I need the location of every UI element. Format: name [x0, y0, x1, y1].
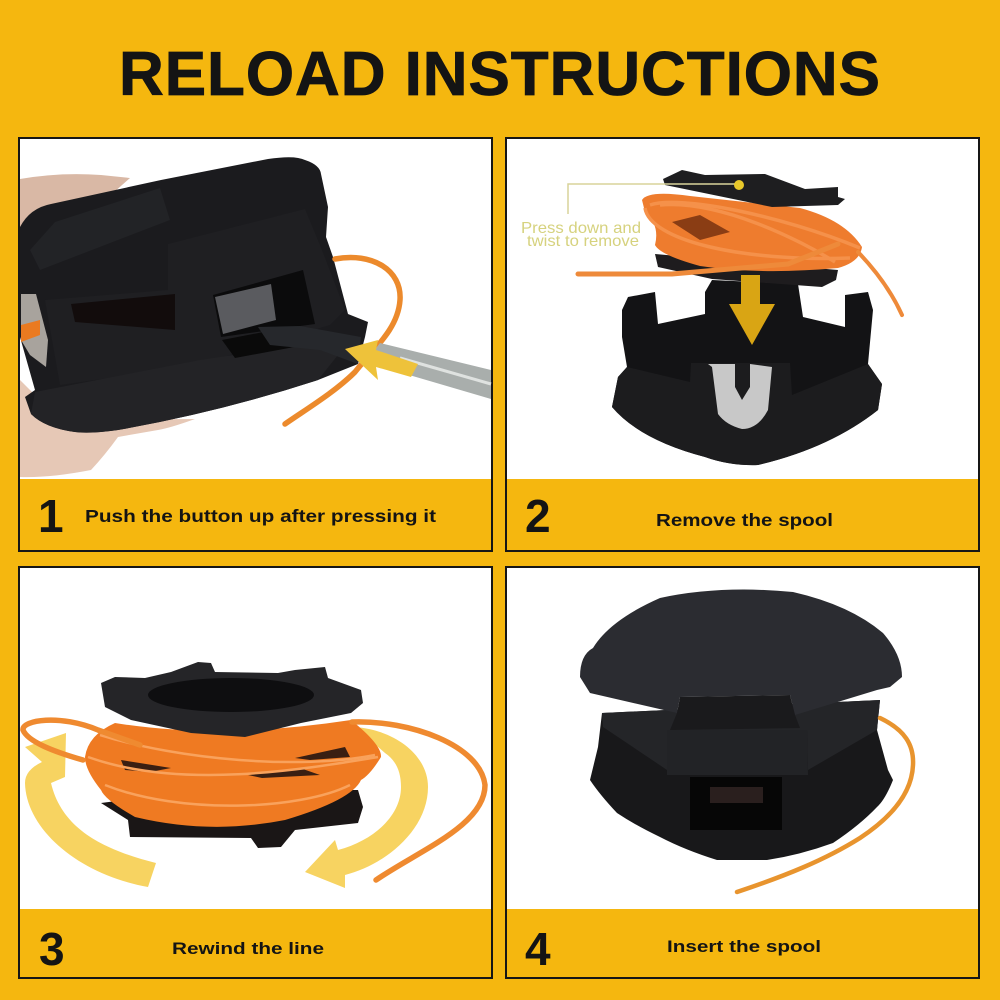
metal tool	[258, 326, 491, 399]
orange line	[737, 718, 913, 892]
window	[690, 777, 782, 830]
notch	[670, 695, 800, 730]
caption bar	[20, 479, 491, 550]
hand holding the head	[20, 174, 195, 477]
panel 4: insert the spool	[506, 567, 979, 978]
step number 4: 4	[525, 923, 551, 975]
curved arrows	[25, 727, 428, 888]
title: RELOAD INSTRUCTIONS	[119, 40, 880, 109]
lower spool flange	[655, 254, 838, 287]
orange coil	[578, 170, 902, 315]
caption bar	[20, 909, 491, 977]
base front slab	[612, 363, 882, 465]
step number 2: 2	[525, 490, 551, 542]
panel 2: remove the spool	[506, 138, 979, 551]
metal clip	[708, 364, 772, 429]
caption 2: Remove the spool	[656, 510, 833, 530]
callout: Press down and	[521, 220, 641, 237]
caption 1: Push the button up after pressing it	[85, 506, 436, 526]
tab	[667, 730, 808, 775]
line tails	[23, 720, 485, 880]
caption bar	[507, 479, 978, 550]
raised front panel	[45, 209, 345, 385]
top spool flange	[663, 170, 845, 207]
metal eyelet	[21, 294, 48, 367]
callout	[521, 180, 744, 250]
orange line	[285, 257, 400, 424]
step number 1: 1	[38, 490, 64, 542]
panel 1: push the button	[19, 138, 492, 551]
trimmer head side view	[20, 157, 368, 433]
step number 3: 3	[39, 923, 65, 975]
upper band	[602, 700, 880, 770]
window	[213, 270, 315, 337]
line tails	[578, 244, 838, 274]
assembled head lower body	[590, 700, 893, 860]
down arrow	[729, 275, 775, 345]
base cap	[612, 280, 882, 465]
callout: twist to remove	[527, 233, 639, 250]
caption 4: Insert the spool	[667, 937, 821, 956]
left slot	[71, 294, 175, 330]
assembled head top cap	[580, 590, 902, 715]
top cap highlight	[30, 188, 170, 270]
orange coil	[85, 720, 381, 827]
arrow	[345, 340, 418, 380]
spool bottom flange	[101, 790, 363, 848]
bottom lip	[31, 340, 350, 433]
panel 3: rewind the line	[19, 567, 492, 978]
caption 3: Rewind the line	[172, 939, 324, 958]
spool top flange	[101, 662, 363, 737]
caption bar	[507, 909, 978, 977]
